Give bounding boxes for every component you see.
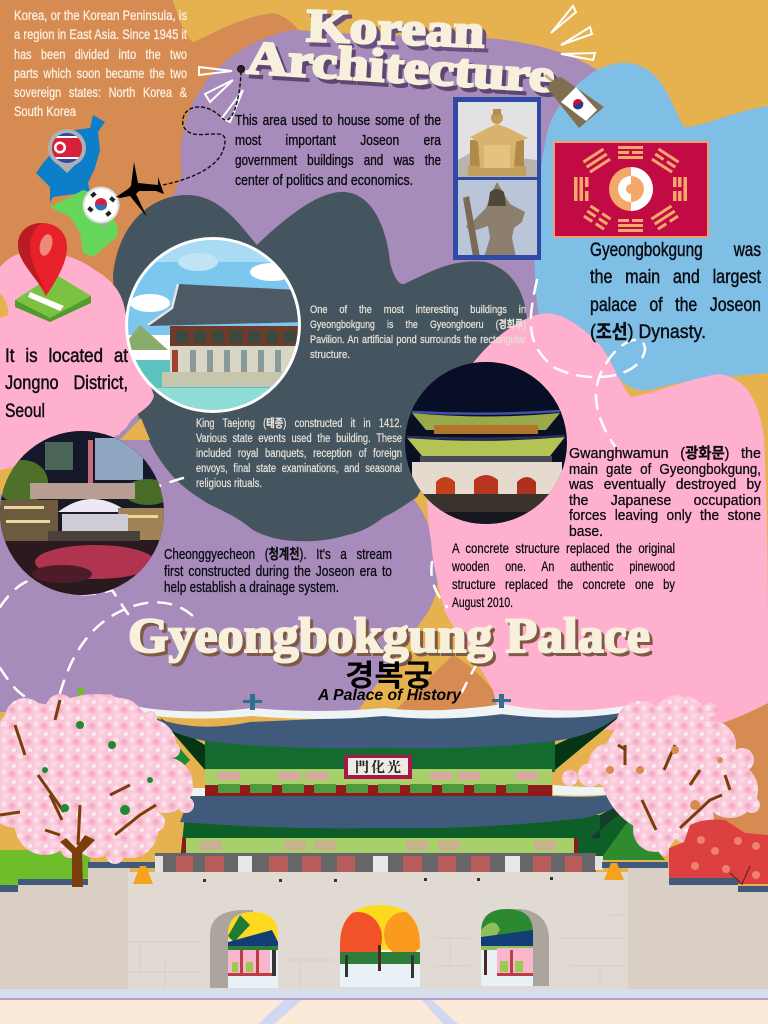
photos: statues in blue frame xyxy=(453,97,541,260)
text: King Taejong: envoys, final state examinations, and seasonal xyxy=(196,463,402,475)
text: government buildings: government buildings and was the xyxy=(235,152,441,169)
right green bush xyxy=(590,815,665,860)
text: Gwanghwamun xyxy=(568,442,761,540)
text: King Taejong: religious rituals. xyxy=(196,478,262,490)
palace main wall xyxy=(128,872,628,990)
text: concrete structure: wooden one. An authentic pinewood xyxy=(451,558,675,574)
icon: tag with Korean flag xyxy=(545,75,604,128)
text: Gyeonghoeru: One of the most interesting buildings in xyxy=(310,304,526,316)
text: Gyeonghoeru: Pavilion. An artificial pond surrounds the rectangular xyxy=(310,334,526,346)
background: blue blob xyxy=(535,63,768,390)
title: Korean Architecture: Korean xyxy=(309,4,489,62)
background: dark slate blob xyxy=(113,192,527,541)
ground: pavement xyxy=(0,989,768,1024)
palace centre arch xyxy=(340,905,420,987)
background: orange blob lower right xyxy=(700,703,768,860)
statue: seated king xyxy=(458,109,537,177)
text: King Taejong xyxy=(196,415,402,490)
dashed route lower left xyxy=(0,478,478,696)
heading: Gyeongbokgung Palace: Gyeongbokgung Palace xyxy=(131,610,653,666)
text: location: Seoul xyxy=(5,401,45,422)
dashed route top right xyxy=(531,280,645,448)
palace lower band xyxy=(182,838,578,853)
text: Gyeonghoeru xyxy=(310,304,526,361)
text: Cheonggyecheon xyxy=(164,544,392,596)
palace right arch xyxy=(481,908,549,986)
palace: Gwanghwamun illustration xyxy=(0,694,768,990)
text: Gwanghwamun: Gwanghwamun (광화문) the xyxy=(569,442,761,463)
text: location: It is located at xyxy=(5,346,129,367)
icon: location pin on map tile xyxy=(15,223,91,322)
text: King Taejong: King Taejong (태종) constructed it in 1412. xyxy=(196,415,402,431)
photo: Cheonggyecheon stream xyxy=(0,431,172,596)
background: mustard wedge left xyxy=(120,418,150,440)
text: Korea intro xyxy=(14,7,188,119)
text: Gwanghwamun: base. xyxy=(569,523,603,540)
background: orange blob lower centre xyxy=(385,655,500,720)
red bush on the right xyxy=(669,820,768,884)
text: government buildings: most important Joseon era xyxy=(235,132,442,149)
text: Korea intro: Korea, or the Korean Peninsula, is xyxy=(14,7,187,23)
text: concrete structure: August 2010. xyxy=(452,594,513,610)
text: concrete structure: structure replaced the concrete one by xyxy=(452,576,675,592)
title: Korean Architecture xyxy=(245,0,560,107)
text: main palace xyxy=(590,239,761,344)
palace right side wall xyxy=(628,868,768,990)
palace upper band xyxy=(205,769,552,796)
background: pink blob right xyxy=(427,313,768,730)
text: concrete structure xyxy=(451,540,675,610)
palace bell cones xyxy=(133,863,624,884)
text: location: Jongno District, xyxy=(5,373,128,394)
text: government buildings xyxy=(235,112,442,189)
subtitle: A Palace of History xyxy=(317,687,462,704)
text: Korea intro: South Korea xyxy=(14,103,76,119)
palace side walls xyxy=(0,868,130,990)
icon: airplane with dotted flight path xyxy=(116,66,244,217)
flag: royal Joseon flag xyxy=(554,142,708,237)
text: concrete structure: A concrete structure replaced the original xyxy=(452,540,675,556)
background: pink blob left xyxy=(0,252,154,470)
text: main palace: (조선) Dynasty. xyxy=(590,317,706,344)
text: King Taejong: included royal banquets, reception of foreign xyxy=(196,448,402,460)
heading: Korean name: 경복궁 xyxy=(345,651,433,695)
palace left arch xyxy=(210,910,280,988)
palace upper roof xyxy=(133,694,625,772)
heading: Gyeongbokgung Palace: Gyeongbokgung Palace xyxy=(128,607,650,663)
title: Korean Architecture: Architecture xyxy=(245,32,556,103)
tree: left cherry blossom xyxy=(0,694,194,887)
text: Korea intro: has been divided into the two xyxy=(14,46,187,62)
text: government buildings: center of politics and economics. xyxy=(235,172,413,189)
tree: right cherry blossom xyxy=(562,695,760,856)
text: Korea intro: sovereign states: North Korea & xyxy=(14,84,188,100)
left background bushes xyxy=(0,688,190,888)
background: purple blob xyxy=(0,30,606,712)
text: Gyeonghoeru: structure. xyxy=(310,349,350,361)
text: Cheonggyecheon: help establish a drainage system. xyxy=(164,580,339,596)
photo: Gwanghwamun at night xyxy=(405,362,567,527)
photo: Gyeonghoeru pavilion xyxy=(120,235,310,415)
text: Cheonggyecheon: first constructed during the Joseon era to xyxy=(164,564,392,580)
palace wall caps xyxy=(0,862,768,892)
palace signboard xyxy=(344,755,412,779)
text: location xyxy=(5,346,129,422)
text: Gyeonghoeru: Gyeongbokgung is the Gyeonghoeru (경회루) xyxy=(310,316,526,332)
text: Korea intro: parts which soon became the two xyxy=(14,65,187,81)
text: government buildings: This area used to house some of the xyxy=(235,112,441,129)
background: orange blob left xyxy=(0,0,311,293)
title: Korean Architecture: Architecture xyxy=(249,36,560,107)
sparkles near title right xyxy=(551,6,595,60)
background: mustard sliver at left edge xyxy=(0,293,8,318)
text: Korea intro: a region in East Asia. Since 1945 it xyxy=(14,26,187,42)
palace lower roof xyxy=(180,783,652,860)
sparkles near title left xyxy=(199,67,243,122)
title: Korean Architecture: Korean xyxy=(306,0,485,58)
statue: admiral xyxy=(463,182,525,257)
text: King Taejong: Various state events used the building. These xyxy=(196,433,402,445)
palace signboard: 門化光 xyxy=(355,757,401,777)
text: Cheonggyecheon: Cheonggyecheon (청계천). It's a stream xyxy=(164,544,392,564)
icon: Korean peninsula map with flag pins xyxy=(36,115,120,257)
palace grey wall with windows xyxy=(155,853,603,873)
